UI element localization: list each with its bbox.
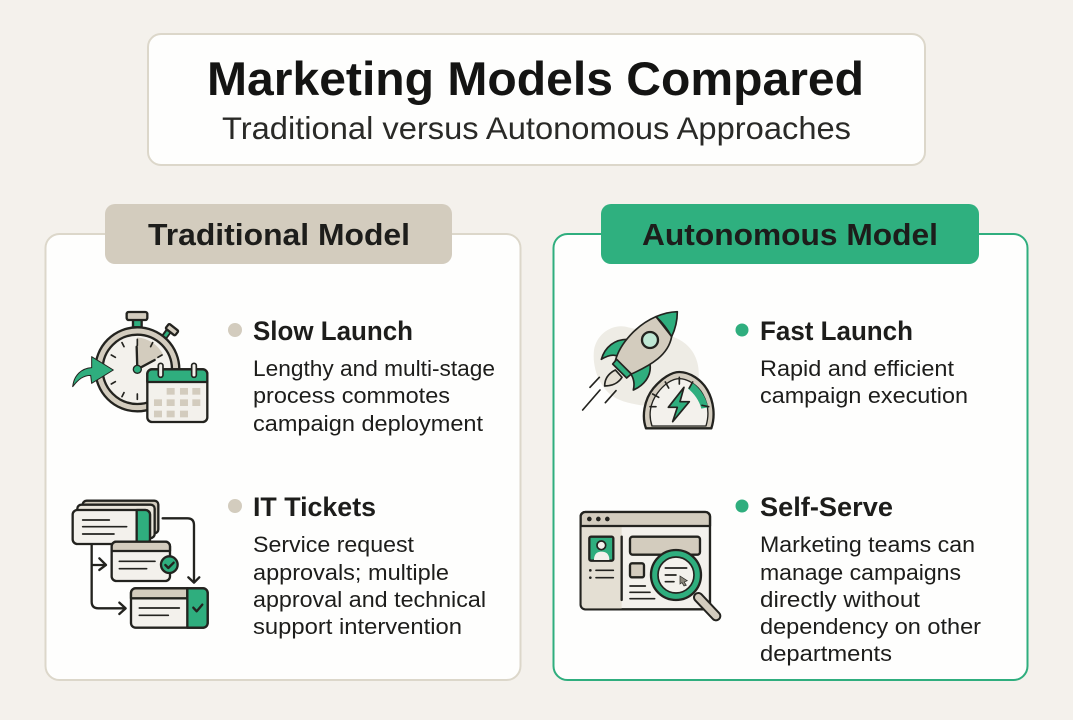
title block	[148, 34, 925, 165]
bullet: it tickets	[228, 499, 242, 513]
bullet: self-serve	[736, 500, 748, 512]
heading: it tickets: IT Tickets	[253, 492, 376, 522]
text: self-serve description: dependency on other	[760, 614, 982, 639]
bullet: slow launch	[228, 323, 242, 337]
panel: autonomous model	[554, 204, 1028, 680]
text: fast launch description: campaign execution	[760, 383, 968, 408]
panel: traditional model	[46, 204, 520, 680]
title: Marketing Models Compared	[207, 52, 864, 105]
icon: self-serve dashboard	[581, 512, 716, 616]
text: self-serve description: manage campaigns	[760, 560, 961, 585]
text: self-serve description: directly without	[760, 587, 921, 612]
heading: slow launch: Slow Launch	[253, 316, 413, 346]
text: self-serve description	[760, 532, 982, 666]
text: slow launch description: campaign deployment	[253, 411, 484, 436]
header: autonomous model: Autonomous Model	[642, 218, 938, 252]
header: traditional model	[105, 204, 452, 264]
text: fast launch description: Rapid and efficient	[760, 356, 955, 381]
heading: self-serve: Self-Serve	[760, 492, 893, 522]
text: slow launch description: process commotes	[253, 383, 450, 408]
text: self-serve description: departments	[760, 641, 892, 666]
text: self-serve description: Marketing teams can	[760, 532, 975, 557]
header: autonomous model	[601, 204, 979, 264]
icon: stopwatch and calendar	[73, 312, 207, 422]
text: slow launch description: Lengthy and multi-stage	[253, 356, 495, 381]
text: it tickets description: approval and technical	[253, 587, 486, 612]
text: fast launch description	[760, 356, 968, 408]
bullet: fast launch	[736, 324, 748, 336]
header: traditional model: Traditional Model	[148, 218, 410, 252]
text: it tickets description: support intervention	[253, 614, 462, 639]
icon: rocket and speedometer	[583, 312, 714, 428]
text: it tickets description	[253, 532, 486, 639]
heading: fast launch: Fast Launch	[760, 316, 913, 346]
text: it tickets description: Service request	[253, 532, 415, 557]
icon: ticket workflow	[73, 501, 208, 628]
subtitle: Traditional versus Autonomous Approaches	[222, 110, 851, 146]
text: slow launch description	[253, 356, 495, 436]
text: it tickets description: approvals; multiple	[253, 560, 449, 585]
